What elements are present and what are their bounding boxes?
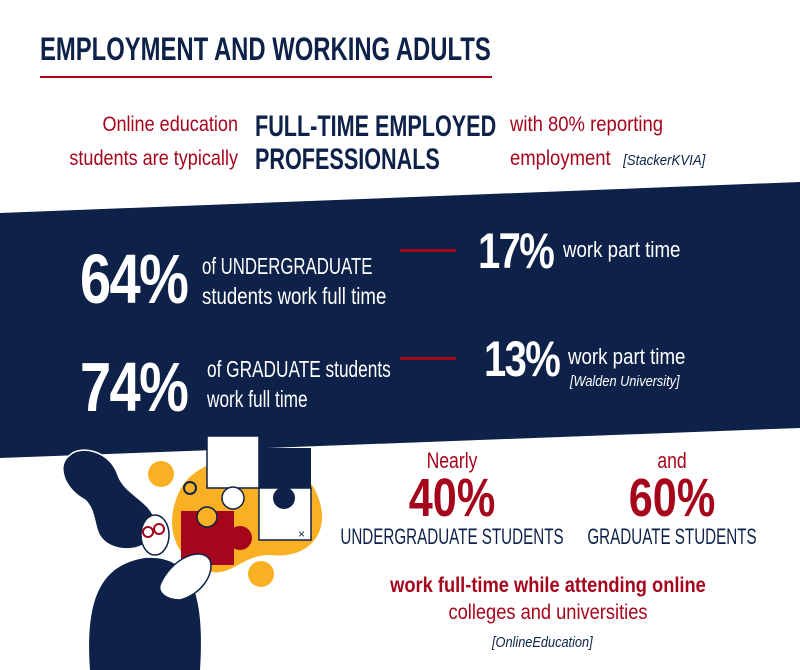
stat: nearly 40% undergraduate: Nearly [427, 448, 477, 473]
intro headline: FULL-TIME EMPLOYED [255, 110, 496, 143]
stat: and 60% graduate: GRADUATE STUDENTS [587, 524, 757, 549]
intro text right: employment [StackerKVIA] [510, 147, 705, 170]
title: EMPLOYMENT AND WORKING ADULTS [40, 31, 491, 67]
stat: and 60% graduate: 60% [629, 468, 715, 528]
intro text right [510, 113, 706, 170]
connector line 2 [400, 357, 456, 360]
text: of GRADUATE students [207, 356, 391, 382]
title underline [40, 76, 492, 78]
stat: 13% part time: 13% [484, 331, 559, 387]
source onlineeducation: [OnlineEducation] [492, 634, 593, 651]
connector line 1 [400, 249, 456, 252]
closing statement: colleges and universities [448, 601, 648, 624]
intro text left: Online education [102, 113, 238, 136]
intro text left [69, 113, 238, 170]
text: students work full time [202, 283, 386, 309]
closing statement [390, 574, 706, 624]
stat: nearly 40% undergraduate: 40% [409, 468, 495, 528]
text: work full time [207, 386, 308, 412]
stat: and 60% graduate [587, 448, 757, 549]
source walden: [Walden University] [570, 373, 680, 390]
stat: and 60% graduate: and [657, 448, 687, 473]
intro headline: PROFESSIONALS [255, 143, 440, 176]
illustration: woman with puzzle: × [298, 527, 305, 541]
closing statement: work full-time while attending online [390, 574, 706, 597]
text: work part time [568, 344, 685, 369]
illustration: woman with puzzle [64, 436, 322, 670]
intro text left: students are typically [69, 147, 238, 170]
stat: nearly 40% undergraduate [340, 448, 564, 549]
intro text right: with 80% reporting [510, 113, 663, 136]
stat: 17% part time: 17% [478, 223, 553, 279]
stat: 74% graduate: 74% [80, 348, 187, 426]
intro headline [255, 110, 496, 176]
stat: nearly 40% undergraduate: UNDERGRADUATE STUDENTS [340, 524, 564, 549]
text: of UNDERGRADUATE [202, 253, 372, 279]
stat: 64% undergraduate: 64% [80, 240, 187, 318]
text: work part time [563, 237, 680, 262]
